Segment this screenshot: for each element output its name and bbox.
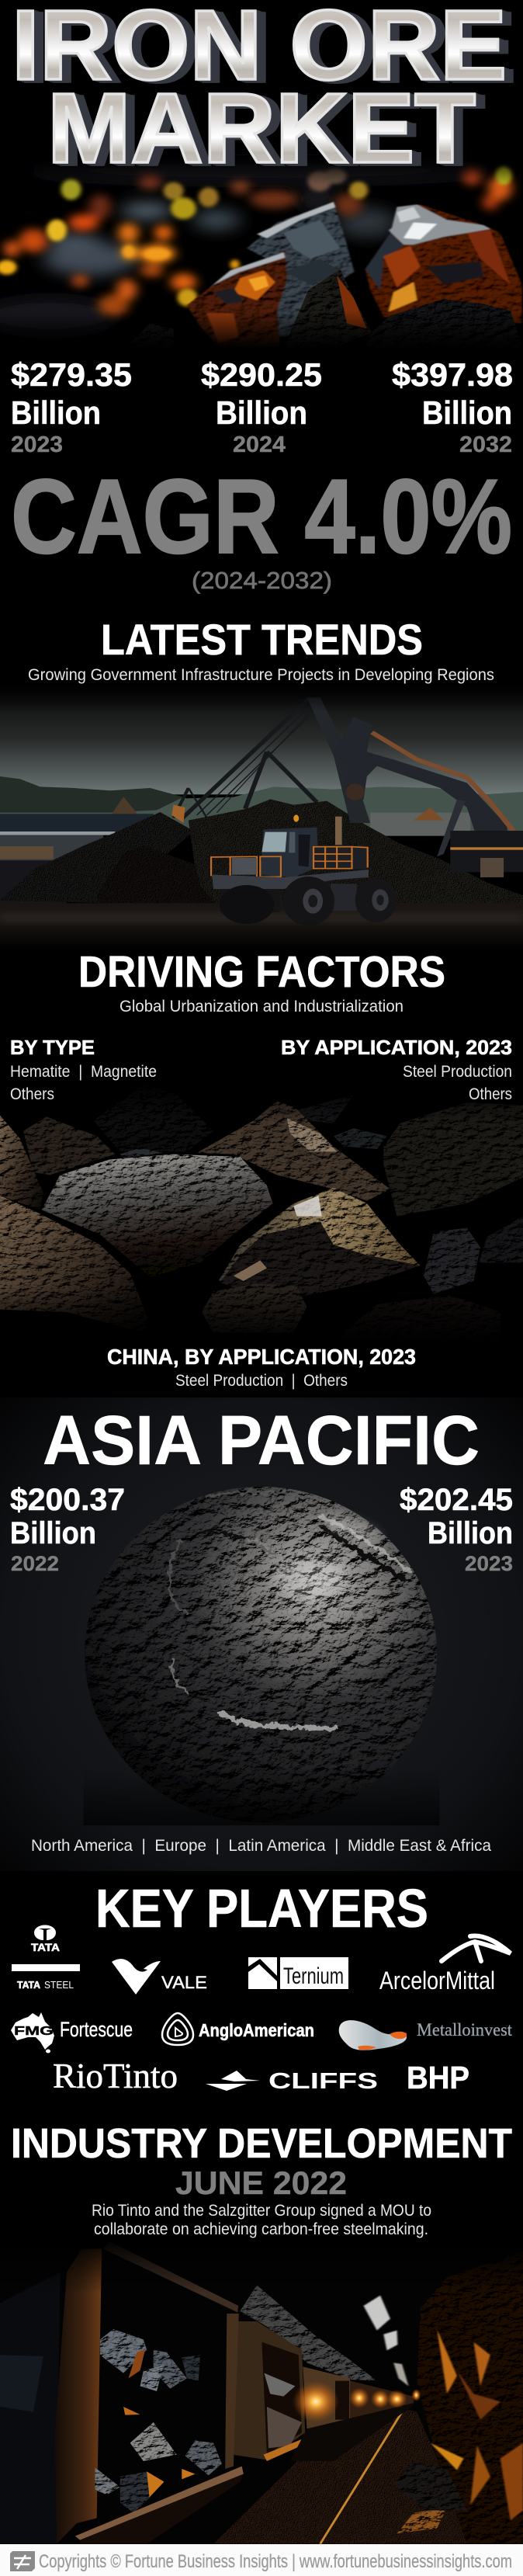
stat 2022 [10, 1483, 125, 1575]
truck [211, 814, 397, 925]
logo: anglo american: AngloAmerican [199, 2020, 314, 2040]
segment: by application: BY APPLICATION, 2023 [281, 1036, 512, 1059]
hero image: glowing iron ore rocks [0, 155, 523, 349]
logo: tata steel: TATA [31, 1941, 60, 1953]
segment: china by application: CHINA, BY APPLICATION, 2023 [107, 1345, 416, 1369]
heading: asia pacific: ASIA PACIFIC [43, 1402, 480, 1480]
foreground dark rocks [123, 269, 523, 349]
main piles [189, 799, 523, 906]
footer logo icon [10, 2551, 35, 2571]
image fade bottom [0, 922, 523, 950]
segment: by type: BY TYPE [10, 1036, 95, 1059]
segment: by application: Steel Production [403, 1063, 512, 1081]
stat 2023 [11, 356, 132, 457]
stat 2024: Billion [216, 394, 307, 431]
rock: top centre [197, 1101, 390, 1201]
segment: by application [281, 1036, 512, 1103]
CAGR period: (2024-2032) [192, 567, 332, 594]
stat 2022: $200.37 [10, 1483, 125, 1517]
segment: china by application: Steel Production | Others [175, 1372, 348, 1390]
logos [11, 1925, 513, 2095]
crane frame [174, 699, 317, 821]
logo: vale: VALE [161, 1973, 207, 1992]
globe surface cracks and highlights [169, 1492, 410, 1729]
logo: fortescue: Fortescue [60, 2018, 133, 2041]
heading: key players: KEY PLAYERS [95, 1878, 428, 1939]
rock: left edge [0, 1116, 43, 1210]
stat 2023: $279.35 [11, 356, 132, 393]
logo: cliffs [206, 2069, 378, 2094]
sky [0, 683, 523, 794]
segment: china by application [107, 1345, 416, 1390]
rock: centre grey [42, 1154, 273, 1277]
stat 2022: 2022 [11, 1552, 59, 1575]
logo: vale [112, 1959, 207, 1994]
title line 2: MARKET [47, 73, 476, 184]
ground [0, 903, 523, 950]
hills [0, 776, 523, 833]
stat 2032: Billion [422, 394, 512, 431]
globe [83, 1487, 440, 1825]
logo: metalloinvest [339, 2020, 513, 2050]
logo: arcelormittal: ArcelorMittal [379, 1967, 495, 1994]
footer [0, 2544, 523, 2576]
stat 2023 asia pacific: Billion [428, 1516, 513, 1550]
development text [92, 2202, 431, 2238]
logo: bhp: BHP [407, 2060, 469, 2095]
ceiling rock [113, 2244, 409, 2386]
excavator [307, 697, 523, 877]
near car ore [95, 2329, 222, 2513]
segment: by type: Hematite | Magnetite [10, 1063, 157, 1081]
development text: Rio Tinto and the Salzgitter Group signed a MOU to [92, 2202, 431, 2220]
segment: by type [10, 1036, 157, 1103]
near car rail [75, 2467, 244, 2540]
image fade top [0, 683, 523, 712]
stat 2023 asia pacific: $202.45 [400, 1483, 513, 1517]
stat 2023 asia pacific: 2023 [465, 1552, 513, 1575]
stat 2023: Billion [11, 394, 101, 431]
bokeh glows [5, 167, 511, 316]
rock: centre silver [247, 202, 355, 336]
globe background [0, 1397, 523, 1871]
logo: tata steel: STEEL [44, 1979, 74, 1991]
development text: collaborate on achieving carbon-free steelmaking. [94, 2220, 428, 2238]
rocks image [0, 1074, 523, 1343]
segment: by application: Others [469, 1085, 512, 1103]
stat 2023 asia pacific [400, 1483, 513, 1575]
logo: anglo american [162, 2013, 314, 2045]
small rocks [202, 1217, 523, 1341]
heading: latest trends: LATEST TRENDS [101, 615, 423, 664]
stat 2023: 2023 [11, 432, 63, 457]
ground and track [213, 2407, 467, 2544]
left buildings [112, 797, 137, 814]
stat 2024: 2024 [233, 432, 286, 457]
tunnel top fade [0, 2238, 523, 2293]
rock fades [0, 1074, 523, 1123]
logo: tata steel: TATA [17, 1979, 41, 1991]
logo: tata steel [12, 1925, 80, 1991]
rock: left brown [0, 1196, 148, 1333]
mining site image [0, 683, 523, 950]
distant buildings right [370, 813, 470, 836]
logo: ternium [248, 1957, 348, 1989]
market size stats [11, 356, 513, 457]
regions list: North America | Europe | Latin America | Middle East & Africa [31, 1837, 491, 1855]
development date: JUNE 2022 [175, 2165, 347, 2201]
stat 2024: $290.25 [201, 356, 322, 393]
stat 2024 [201, 356, 322, 457]
rock: centre tan [219, 1188, 421, 1297]
dark background rocks [23, 1085, 523, 1217]
right rock wall [417, 2251, 523, 2544]
bokeh highlights [0, 166, 511, 307]
stat 2022: Billion [10, 1516, 96, 1550]
logo: ternium: Ternium [283, 1963, 344, 1989]
far train cars [232, 2321, 421, 2461]
near car wood frame [55, 2241, 239, 2544]
mine tunnel image [0, 2238, 523, 2544]
driving factor text: Global Urbanization and Industrialization [119, 998, 404, 1015]
logo: cliffs: CLIFFS [268, 2069, 378, 2094]
stat 2032: $397.98 [392, 356, 513, 393]
segment: by type: Others [10, 1085, 54, 1103]
logo: metalloinvest: Metalloinvest [417, 2020, 513, 2040]
stat 2032: 2032 [459, 432, 512, 457]
logo: rio tinto: RioTinto [53, 2056, 178, 2095]
logo: arcelormittal [379, 1935, 511, 1994]
blurred background rocks [0, 159, 494, 334]
latest trend text: Growing Government Infrastructure Projects in Developing Regions [28, 666, 494, 684]
logo: fortescue [11, 2012, 133, 2053]
tunnel base [0, 2241, 523, 2544]
logo: fortescue: FMG [14, 2025, 54, 2038]
heading: driving factors: DRIVING FACTORS [78, 947, 445, 997]
stat 2032 [392, 356, 513, 457]
rock: right orange and silver [365, 204, 522, 324]
rock: left orange [187, 251, 287, 348]
hero fades [0, 155, 523, 184]
